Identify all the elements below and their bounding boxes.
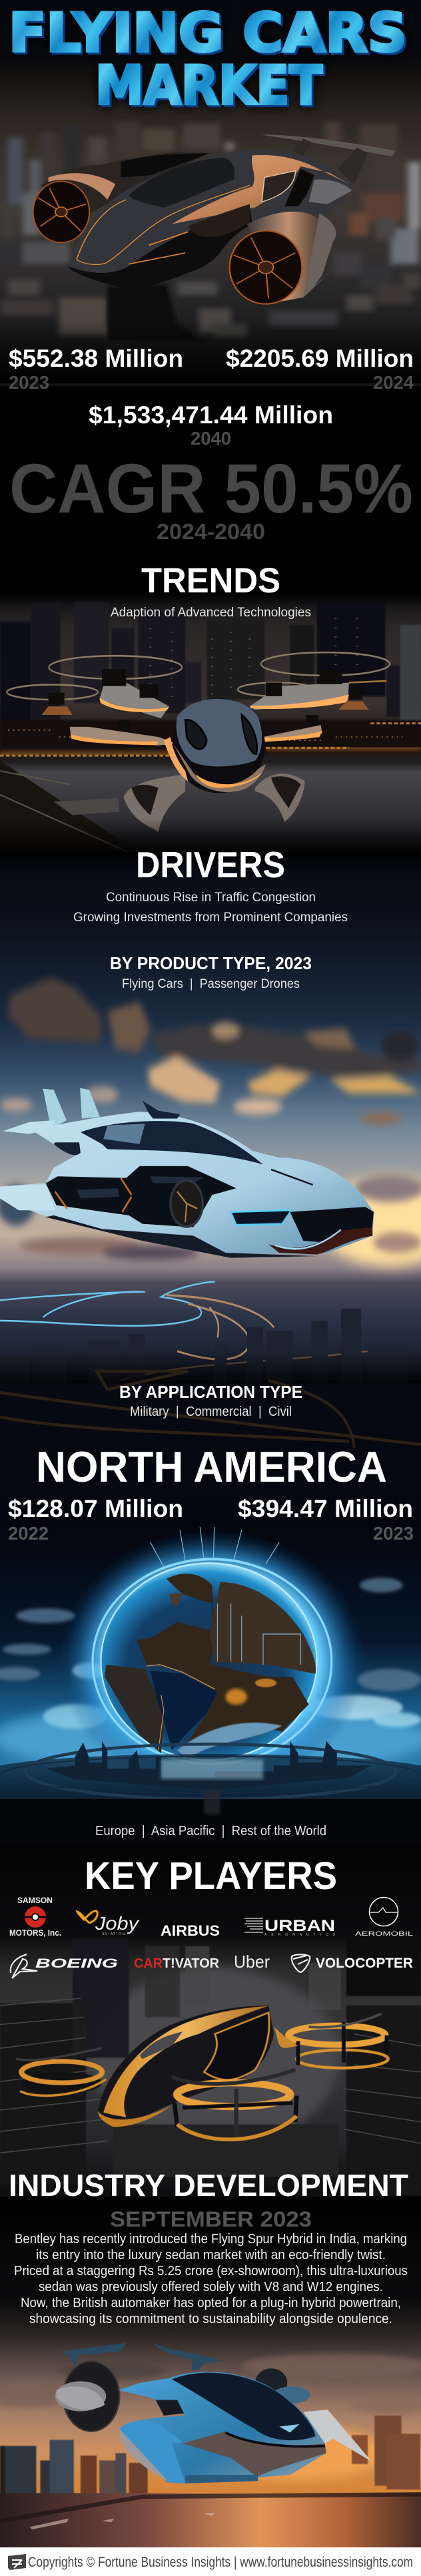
- date heading: SEPTEMBER 2023: [110, 2207, 312, 2231]
- logo: Urban Aeronautics: AERONAUTICS: [264, 1933, 336, 1937]
- cabin: [173, 698, 265, 793]
- fuselage: [98, 2006, 274, 2127]
- CAGR: CAGR 50.5%: [9, 450, 413, 528]
- trends text: Adaption of Advanced Technologies: [111, 606, 311, 620]
- logo: Urban Aeronautics: [244, 1917, 336, 1937]
- city: [0, 2416, 420, 2506]
- drone image bottom fade: [0, 819, 421, 859]
- image: glowing globe above city: [0, 1371, 421, 1850]
- image: drone over city at night: [0, 592, 421, 865]
- spoiler: [260, 134, 396, 156]
- application type heading: BY APPLICATION TYPE: [119, 1382, 302, 1402]
- logo: Uber: Uber: [234, 1952, 270, 1972]
- logo: Joby Aviation: [77, 1911, 140, 1936]
- drivers text: Continuous Rise in Traffic Congestion: [106, 891, 316, 905]
- logo: Urban Aeronautics: URBAN: [264, 1917, 335, 1935]
- logo: Samson Motors: [9, 1896, 61, 1938]
- rotors: [7, 652, 390, 700]
- key players heading: KEY PLAYERS: [85, 1854, 337, 1898]
- other regions list: Europe | Asia Pacific | Rest of the World: [95, 1824, 326, 1838]
- sky top fade: [0, 852, 421, 872]
- logo: Samson Motors: SAMSON: [17, 1896, 53, 1905]
- drivers text: Growing Investments from Prominent Companies: [73, 911, 348, 925]
- left back wheel housing: [40, 152, 209, 222]
- panel: trends: [0, 561, 421, 865]
- left wheel: [33, 181, 89, 242]
- continents: [137, 1574, 309, 1750]
- stat north america 2023: 2023: [373, 1523, 414, 1544]
- stat 2024: $2205.69 Million: [226, 345, 414, 372]
- image: blue flying car over city at sunset: [0, 2204, 421, 2547]
- underbody: [69, 206, 252, 291]
- rear fins: [61, 2343, 223, 2370]
- logo: Joby Aviation: AVIATION: [102, 1932, 125, 1936]
- CAGR: 2024-2040: [157, 519, 265, 544]
- panel: key players: [0, 1844, 421, 2217]
- stat 2023: $552.38 Million: [9, 345, 183, 372]
- application type list: Military | Commercial | Civil: [130, 1404, 292, 1419]
- panel: market size stats: [9, 345, 414, 544]
- stat north america 2022: $128.07 Million: [8, 1495, 183, 1522]
- legs: [123, 773, 304, 832]
- north america heading: NORTH AMERICA: [36, 1442, 387, 1491]
- development text block: Now, the British automaker has opted for a plug-in hybrid powertrain,: [21, 2296, 401, 2310]
- body: [69, 149, 352, 291]
- development text block: sedan was previously offered solely with V8 and W12 engines.: [39, 2280, 383, 2294]
- panel: hero with title: [0, 0, 421, 386]
- sky bottom fade: [0, 1351, 421, 1391]
- development text block: [14, 2232, 408, 2326]
- trends heading: TRENDS: [141, 561, 280, 600]
- logo: Aeromobil: [355, 1897, 413, 1937]
- development text block: its entry into the luxury sedan market with an eco-friendly twist.: [36, 2248, 386, 2262]
- side rotor left: [16, 2048, 106, 2095]
- stat 2040: 2040: [191, 428, 231, 449]
- logo: Aeromobil: AEROMOBIL: [355, 1930, 413, 1937]
- image: hero city and flying car: [0, 0, 421, 386]
- image: flying sports car in sunset sky: [0, 852, 421, 1385]
- logos row two: [11, 1952, 413, 1978]
- drivers text: [73, 891, 348, 925]
- panel: application type and regions: [0, 1371, 421, 1850]
- logo: Cartivator: CART!VATOR: [134, 1956, 220, 1971]
- front rotor: [172, 2069, 296, 2139]
- logo: Volocopter: VOLOCOPTER: [316, 1956, 413, 1971]
- bronze band: [172, 155, 349, 224]
- logos row one: [9, 1896, 413, 1939]
- top fade: [0, 2197, 421, 2237]
- hero fade: [0, 318, 421, 383]
- product type heading: BY PRODUCT TYPE, 2023: [110, 953, 312, 973]
- image: orange air taxi among towers: [0, 1844, 421, 2217]
- side rotor right: [288, 2014, 388, 2068]
- logo: Fortune Business Insights: [8, 2554, 26, 2570]
- stat 2023: 2023: [9, 372, 49, 393]
- logo: Samson Motors: MOTORS, Inc.: [9, 1928, 61, 1938]
- stat north america 2022: 2022: [8, 1523, 49, 1544]
- logo: Joby Aviation: Joby: [95, 1913, 140, 1934]
- industry development heading: INDUSTRY DEVELOPMENT: [9, 2168, 408, 2203]
- logo: Volocopter: [292, 1954, 413, 1972]
- stat 2040: [89, 401, 333, 449]
- product type list: Flying Cars | Passenger Drones: [122, 977, 300, 991]
- stat 2024: [226, 345, 414, 393]
- title: [9, 2, 407, 116]
- stat 2024: 2024: [373, 372, 414, 393]
- logo: Boeing: BOEING: [35, 1957, 118, 1971]
- logo: Boeing: [11, 1954, 118, 1978]
- stat 2023: [9, 345, 183, 393]
- drone image top fade: [0, 590, 421, 606]
- fuselage: [118, 2372, 326, 2483]
- logo: Airbus: AIRBUS: [161, 1922, 220, 1939]
- shoreline lights: [0, 748, 421, 754]
- arms: [99, 683, 349, 718]
- stat north america 2023: [238, 1495, 414, 1544]
- title: MARKET: [95, 55, 322, 116]
- right wheel: [230, 212, 336, 304]
- stat north america 2023: $394.47 Million: [238, 1495, 413, 1522]
- fans: [255, 2368, 287, 2398]
- title: FLYING CARS: [9, 2, 407, 64]
- light trails: [0, 1281, 368, 1385]
- water: [0, 2493, 421, 2547]
- stat north america 2022: [8, 1495, 183, 1544]
- footer: [0, 2547, 421, 2576]
- car: [43, 1088, 100, 1129]
- drivers heading: DRIVERS: [136, 844, 285, 885]
- platform and skyline: [0, 1754, 421, 1799]
- panel: drivers and product type: [0, 844, 421, 1391]
- panel: industry development: [0, 2197, 421, 2547]
- development text block: showcasing its commitment to sustainability alongside opulence.: [29, 2312, 392, 2326]
- stat 2040: $1,533,471.44 Million: [89, 401, 333, 429]
